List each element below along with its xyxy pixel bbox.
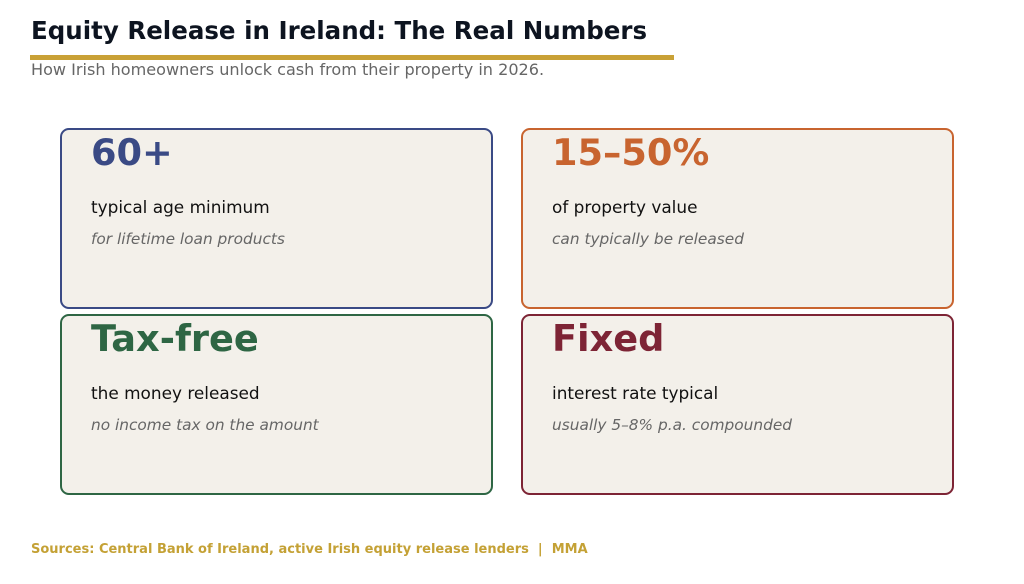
note: usually 5–8%: usually 5–8% p.a. compounded bbox=[552, 416, 792, 434]
note: can be released: can typically be released bbox=[552, 230, 744, 248]
note: no income tax: no income tax on the amount bbox=[91, 416, 319, 434]
panel: fixed rate bbox=[521, 314, 954, 495]
title underline bbox=[30, 55, 674, 60]
label: typical age minimum: typical age minimum bbox=[91, 197, 270, 217]
panel: age minimum bbox=[60, 128, 493, 309]
panel: tax-free bbox=[60, 314, 493, 495]
note: lifetime loan products: for lifetime loan products bbox=[91, 230, 285, 248]
label: the money released: the money released bbox=[91, 383, 260, 403]
label: of property value: of property value bbox=[552, 197, 697, 217]
subtitle: How Irish homeowners unlock cash from their property in 2026. bbox=[31, 60, 544, 79]
sources footer: Sources: Central Bank of Ireland, active Irish equity release lenders | MMA bbox=[31, 542, 588, 557]
stat: Fixed: Fixed bbox=[552, 317, 664, 360]
stat: 15–50%: 15–50% bbox=[552, 131, 709, 174]
label: interest rate typical: interest rate typical bbox=[552, 383, 718, 403]
panel: property value bbox=[521, 128, 954, 309]
stat: Tax-free: Tax-free bbox=[91, 317, 259, 360]
title: Equity Release in Ireland: The Real Numbers bbox=[31, 16, 647, 44]
stat: 60+: 60+ bbox=[91, 131, 173, 174]
